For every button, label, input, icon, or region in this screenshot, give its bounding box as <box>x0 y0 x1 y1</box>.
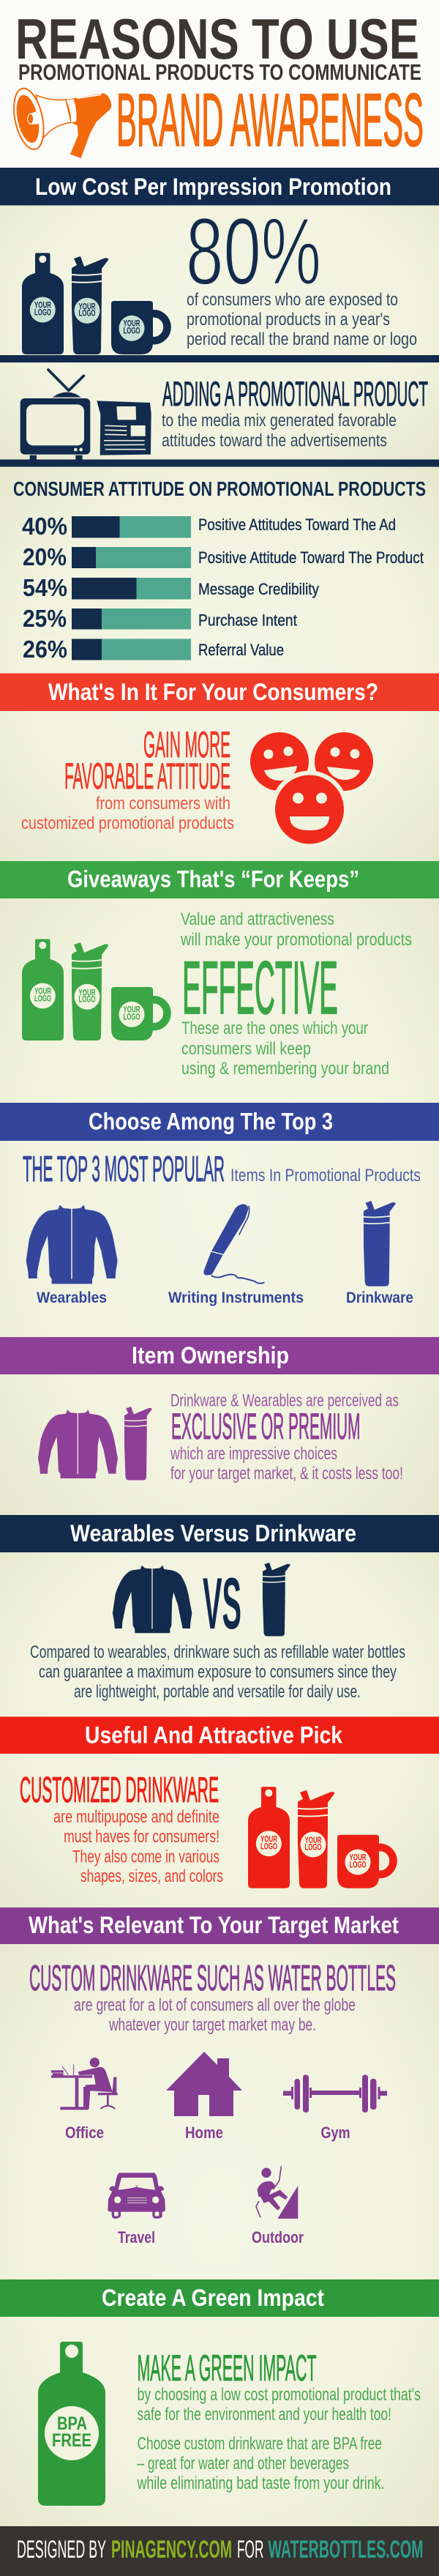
icon: megaphone <box>9 86 111 158</box>
text: ones consumers keep: using & remembering your brand <box>181 1059 389 1079</box>
text: favorable attitudes <box>162 411 397 451</box>
labels: top 3 items: Drinkware <box>346 1289 413 1306</box>
banner: item ownership <box>0 1337 439 1374</box>
text: value and attractiveness <box>180 909 412 950</box>
banner: create a green impact: Create A Green Impact <box>102 2285 324 2311</box>
icon: car <box>108 2173 165 2219</box>
bar: 40% positive attitudes toward the ad: 40% <box>22 513 67 540</box>
banner: useful and attractive pick: Useful And Attractive Pick <box>85 1722 342 1749</box>
icon: jacket <box>26 1205 118 1284</box>
text: great for consumers <box>74 1995 356 2035</box>
icon: bpa free bottle: BPA <box>57 2413 87 2434</box>
panel: consumer attitude <box>13 477 426 663</box>
text: ones consumers keep: These are the ones which your <box>181 1019 368 1038</box>
icon: red drinkware set: YOUR <box>350 1853 367 1862</box>
bar: 20% positive attitude toward the product <box>23 543 424 570</box>
panel: top 3 items <box>23 1150 421 1306</box>
icon: green drinkware set: YOUR <box>34 988 51 997</box>
banner: wearables versus drinkware <box>0 1515 439 1552</box>
icon: navy drinkware set: YOUR <box>34 302 51 310</box>
panel: customized drinkware <box>20 1771 394 1888</box>
bar: 26% referral value: 26% <box>23 636 67 663</box>
banner: item ownership: Item Ownership <box>132 1342 289 1369</box>
icon: purple jacket <box>38 1410 118 1478</box>
text: from consumers: customized promotional products <box>21 814 234 833</box>
banner: create a green impact <box>0 2279 439 2317</box>
text: value and attractiveness: Value and attractiveness <box>181 909 334 929</box>
text: multipurpose: must haves for consumers! <box>64 1827 220 1847</box>
icon: outdoor climber <box>256 2166 298 2219</box>
labels: top 3 items: Wearables <box>37 1289 107 1306</box>
text: impressive choices: which are impressive choices <box>170 1444 337 1464</box>
icon: red drinkware set: YOUR <box>260 1835 277 1844</box>
panel: target market <box>29 1959 396 2246</box>
panel: favorable attitude <box>21 724 373 848</box>
panel: item ownership <box>38 1391 403 1484</box>
text: favorable attitudes: attitudes toward the advertisements <box>162 431 387 451</box>
header <box>9 7 424 162</box>
icon: pen <box>203 1204 264 1284</box>
labels: travel outdoor <box>118 2228 304 2246</box>
icon: green drinkware set: LOGO <box>79 996 96 1005</box>
heading: gain more favorable attitude <box>64 724 230 797</box>
banner: what's in it for your consumers <box>0 674 439 711</box>
text: multipurpose: They also come in various <box>72 1847 220 1867</box>
icon: gym <box>283 2075 387 2112</box>
bar chart: consumer attitude <box>22 513 424 663</box>
labels: office home gym <box>65 2123 350 2142</box>
icon: three smiling faces <box>250 732 373 848</box>
labels: office home gym: Office <box>65 2123 104 2142</box>
icon: red drinkware set: YOUR <box>304 1836 322 1845</box>
bar: 25% purchase intent: 25% <box>23 605 67 632</box>
labels: office home gym: Gym <box>320 2123 350 2142</box>
icon: home <box>166 2052 242 2116</box>
stat: 80%: 80% <box>186 198 321 305</box>
bar: 40% positive attitudes toward the ad <box>22 513 396 540</box>
footer: PINAGENCY.COM <box>111 2536 232 2564</box>
icon: red drinkware set: LOGO <box>260 1842 277 1851</box>
icon: green drinkware set: LOGO <box>123 1013 140 1022</box>
icon: navy bottle <box>263 1563 290 1636</box>
icon: green drinkware set: YOUR <box>79 989 96 997</box>
labels: top 3 items <box>37 1289 413 1306</box>
icon: red drinkware set <box>248 1787 394 1888</box>
text: multipurpose: are multipupose and definite <box>53 1807 220 1827</box>
icon: navy drinkware set: LOGO <box>34 309 51 318</box>
icon: red drinkware set: LOGO <box>304 1843 322 1852</box>
text: bpa free drinkware <box>137 2434 384 2493</box>
banner: giveaways that's for keeps <box>0 861 439 898</box>
icon: navy drinkware set: LOGO <box>123 327 140 336</box>
text: choosing low cost <box>138 2385 421 2424</box>
panel: green impact <box>38 2342 421 2506</box>
panel: effective <box>22 909 412 1079</box>
text: impressive choices <box>170 1444 403 1484</box>
icon: bpa free bottle <box>38 2342 105 2506</box>
footer: DESIGNED BY <box>17 2536 106 2564</box>
icon: bpa free bottle: FREE <box>52 2430 91 2451</box>
text: great for consumers: whatever your target market may be. <box>108 2015 316 2035</box>
bar: 26% referral value <box>23 636 284 663</box>
labels: travel outdoor: Travel <box>118 2228 155 2246</box>
footer: FOR <box>237 2536 263 2564</box>
icon: purple bottle <box>124 1407 152 1481</box>
bar: 20% positive attitude toward the product: 20% <box>23 543 67 570</box>
text: ones consumers keep: consumers will keep <box>181 1039 311 1059</box>
bar: 25% purchase intent: Purchase Intent <box>198 611 297 630</box>
labels: top 3 items: Writing Instruments <box>168 1289 304 1306</box>
text: recall description <box>187 290 417 349</box>
bar: 54% message credibility: Message Credibility <box>198 580 319 598</box>
panel: wearables versus drinkware: VS <box>203 1563 241 1644</box>
bar: 54% message credibility: 54% <box>23 574 67 601</box>
banner: low cost per impression promotion <box>0 168 439 205</box>
icon: green drinkware set <box>22 939 167 1041</box>
icon: green drinkware set: LOGO <box>34 995 51 1004</box>
icon: red drinkware set: LOGO <box>350 1861 367 1869</box>
banner: useful and attractive pick <box>0 1716 439 1754</box>
footer <box>0 2526 439 2576</box>
panel: favorable attitude: GAIN MORE <box>143 724 230 765</box>
banner: what's in it for your consumers: What's In It For Your Consumers? <box>48 679 378 705</box>
icon: navy drinkware set <box>22 253 167 354</box>
banner: low cost per impression promotion: Low Cost Per Impression Promotion <box>35 174 391 200</box>
icon: tv and newspaper <box>20 370 151 460</box>
text: from consumers <box>21 794 234 833</box>
bar: 54% message credibility <box>23 574 319 601</box>
icon: green drinkware set: YOUR <box>123 1006 140 1015</box>
bar: 25% purchase intent <box>23 605 297 632</box>
labels: travel outdoor: Outdoor <box>252 2228 304 2246</box>
panel: wearables versus drinkware <box>30 1563 405 1702</box>
icon: navy drinkware set: YOUR <box>79 302 96 311</box>
bar: 26% referral value: Referral Value <box>198 641 284 659</box>
banner: wearables versus drinkware: Wearables Versus Drinkware <box>70 1520 356 1546</box>
text: ones consumers keep <box>181 1019 389 1079</box>
icon: office <box>51 2058 118 2110</box>
banner: what's relevant to your target market <box>0 1907 439 1944</box>
text: from consumers: from consumers with <box>96 794 230 814</box>
bar: 40% positive attitudes toward the ad: Positive Attitudes Toward The Ad <box>198 515 396 534</box>
icon: navy drinkware set: LOGO <box>79 310 96 319</box>
panel: adding a promotional product <box>20 370 428 460</box>
icon: navy jacket <box>113 1566 192 1633</box>
banner: giveaways that's for keeps: Giveaways That's “For Keeps” <box>67 866 359 892</box>
banner: choose among the top 3: Choose Among The Top 3 <box>89 1109 333 1135</box>
text: multipurpose <box>53 1807 223 1886</box>
banner: choose among the top 3 <box>0 1103 439 1141</box>
text: multipurpose: shapes, sizes, and colors <box>80 1866 223 1886</box>
text: comparison <box>30 1642 405 1702</box>
icon: water bottle <box>364 1201 396 1287</box>
icon: navy drinkware set: YOUR <box>123 320 140 329</box>
panel: 80 percent recall <box>22 198 417 354</box>
text: bpa free drinkware: – great for water and other beverages <box>138 2454 349 2473</box>
labels: office home gym: Home <box>185 2123 223 2142</box>
text: recall description: promotional products in a year's <box>187 310 390 330</box>
